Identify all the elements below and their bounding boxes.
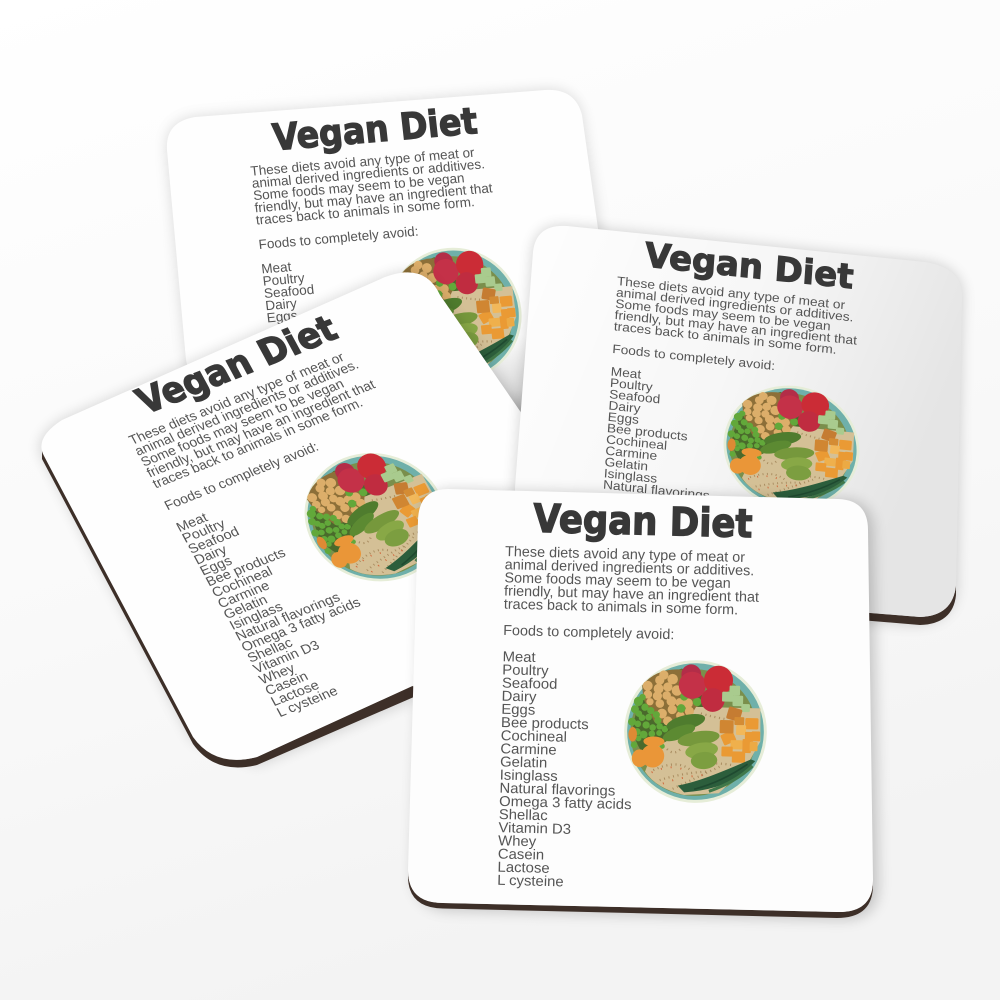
front food list: Meat — [502, 649, 536, 666]
right food list: Isinglass — [603, 466, 658, 486]
front coaster edge — [408, 870, 873, 918]
front food list: Casein — [498, 847, 544, 864]
right food list: Bee products — [607, 421, 689, 443]
front food list: Eggs — [501, 702, 535, 719]
coaster: right — [515, 226, 962, 625]
left food list: Omega 3 fatty acids — [238, 594, 363, 654]
back description: These diets avoid any type of meat or — [250, 145, 476, 179]
front description: Foods to completely avoid: — [503, 623, 675, 643]
right food list: Meat — [610, 364, 642, 382]
front food list: Lactose — [497, 860, 550, 877]
right description: Some foods may seem to be vegan — [615, 296, 831, 333]
front coaster face — [408, 489, 873, 912]
right coaster face — [515, 226, 962, 617]
back coaster content — [245, 97, 529, 396]
front title: Vegan Diet — [533, 497, 753, 547]
front food list: L cysteine — [497, 873, 564, 890]
back food list: Eggs — [266, 308, 298, 325]
left food list: Bee products — [203, 544, 288, 589]
right bowl — [720, 379, 863, 516]
right description: friendly, but may have an ingredient that — [614, 308, 858, 348]
right description: animal derived ingredients or additives. — [616, 285, 854, 324]
front food list: Shellac — [499, 807, 548, 824]
right food list: Dairy — [608, 398, 641, 416]
back description: friendly, but may have an ingredient that — [254, 180, 493, 215]
left title: Vegan Diet — [129, 307, 344, 422]
back description: Foods to completely avoid: — [258, 224, 419, 252]
left food list: Carmine — [215, 577, 272, 611]
left food list: Poultry — [179, 515, 228, 546]
left food list: Natural flavorings — [232, 589, 343, 644]
right title: Vegan Diet — [644, 236, 855, 297]
right food list: Cochineal — [606, 432, 668, 453]
right description: Foods to completely avoid: — [612, 342, 776, 373]
left food list: Seafood — [185, 523, 242, 556]
left description: traces back to animals in some form. — [150, 395, 365, 491]
front food list: Vitamin D3 — [498, 820, 571, 838]
front description: friendly, but may have an ingredient that — [504, 583, 759, 606]
left food list: Dairy — [191, 541, 229, 567]
right description: traces back to animals in some form. — [613, 319, 837, 357]
right food list: Carmine — [605, 443, 658, 463]
back food list: Seafood — [263, 282, 315, 301]
left food list: Isinglass — [227, 598, 285, 633]
back food list: Poultry — [262, 270, 306, 289]
left food list: Lactose — [268, 677, 322, 709]
front food list: Seafood — [502, 676, 558, 693]
front coaster content — [497, 496, 772, 895]
left food list: Whey — [256, 660, 297, 687]
back food list: Meat — [261, 259, 292, 277]
left bowl — [280, 433, 471, 601]
back bowl — [381, 242, 529, 386]
front food list: Whey — [498, 834, 537, 850]
left description: animal derived ingredients or additives. — [132, 357, 361, 459]
left food list: Casein — [262, 668, 311, 698]
back coaster face — [167, 90, 625, 420]
front food list: Omega 3 fatty acids — [499, 794, 632, 813]
front description: Some foods may seem to be vegan — [504, 570, 731, 592]
coaster: front — [408, 489, 878, 919]
front description: traces back to animals in some form. — [504, 597, 738, 618]
right food list: Natural flavorings — [603, 477, 711, 503]
right description: These diets avoid any type of meat or — [617, 274, 846, 312]
front bowl — [623, 659, 768, 805]
right food list: Poultry — [610, 375, 654, 394]
front food list: Gelatin — [500, 755, 547, 772]
back food list: Dairy — [265, 296, 298, 313]
front description: These diets avoid any type of meat or — [505, 544, 745, 566]
left coaster face — [41, 272, 540, 760]
back description: animal derived ingredients or additives. — [251, 156, 486, 191]
front food list: Cochineal — [500, 728, 567, 746]
left food list: Meat — [173, 509, 210, 535]
back description: traces back to animals in some form. — [255, 194, 475, 228]
front food list: Isinglass — [500, 768, 558, 785]
coaster: back — [167, 90, 625, 445]
front food list: Natural flavorings — [499, 781, 615, 800]
front description: animal derived ingredients or additives. — [505, 557, 754, 579]
right food list: Gelatin — [604, 455, 649, 473]
right coaster content — [603, 233, 873, 518]
back title: Vegan Diet — [270, 99, 479, 159]
left description: Some foods may seem to be vegan — [138, 376, 346, 469]
front food list: Carmine — [500, 741, 557, 759]
right food list: Seafood — [609, 387, 661, 406]
front food list: Dairy — [501, 689, 537, 705]
left food list: Cochineal — [209, 563, 275, 600]
back description: Some foods may seem to be vegan — [252, 170, 465, 203]
left food list: L cysteine — [274, 683, 340, 720]
left food list: Gelatin — [221, 591, 270, 622]
coaster: left — [40, 272, 540, 767]
left food list: Eggs — [197, 553, 235, 578]
right coaster edge — [860, 585, 956, 625]
front food list: Poultry — [502, 663, 549, 679]
left coaster edge — [42, 450, 430, 767]
left description: These diets avoid any type of meat or — [126, 349, 347, 448]
right food list: Eggs — [607, 409, 640, 427]
left coaster content — [105, 303, 513, 720]
front food list: Bee products — [501, 715, 589, 733]
left description: Foods to completely avoid: — [162, 439, 321, 513]
left food list: Shellac — [244, 634, 295, 665]
left description: friendly, but may have an ingredient that — [144, 377, 378, 480]
left food list: Vitamin D3 — [250, 637, 322, 676]
